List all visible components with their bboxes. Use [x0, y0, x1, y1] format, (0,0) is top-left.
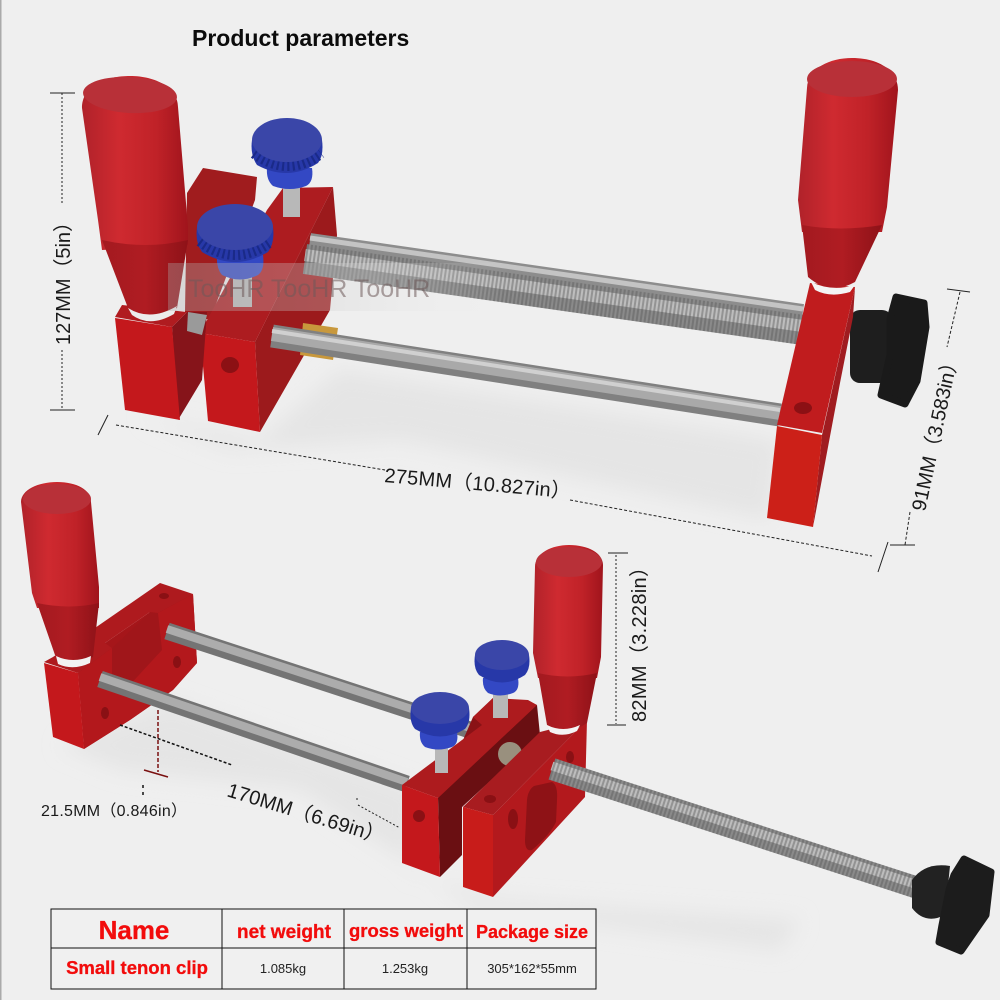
block holes	[101, 593, 181, 719]
upper blue knob	[474, 640, 530, 718]
dimension: 127MM	[50, 93, 75, 410]
table header	[99, 915, 588, 945]
left edge line	[0, 0, 2, 1000]
rear blue knob	[252, 118, 322, 217]
threaded hole	[221, 357, 239, 373]
dimension: 91MM	[890, 289, 970, 545]
front rod	[100, 677, 407, 784]
dimension: 21.5MM: 21.5MM（0.846in）	[41, 802, 187, 820]
title: Product parameters	[192, 25, 409, 51]
right clamp front block	[493, 720, 587, 897]
left block side	[172, 312, 207, 420]
product: bottom clamp	[21, 482, 991, 951]
table row: 1.253kg	[382, 961, 428, 976]
left block top	[44, 583, 193, 673]
right clamp backing	[438, 698, 537, 807]
watermark: TooHR TooHR TooHR	[188, 275, 430, 303]
table header: Name	[99, 915, 169, 945]
right upright top	[777, 283, 855, 433]
smooth upper rod	[310, 238, 803, 311]
right clamp front-left block	[438, 705, 540, 877]
dimension: 170MM: 170MM（6.69in）	[225, 779, 387, 848]
dimension: 91MM: 91MM（3.583in）	[907, 351, 963, 513]
rear part of left block	[185, 168, 257, 320]
rear rod	[167, 629, 473, 731]
left block front	[44, 663, 84, 749]
right upright front	[767, 426, 822, 527]
table row: 1.085kg	[260, 961, 306, 976]
right handle	[533, 545, 603, 735]
rod between blocks	[187, 312, 207, 335]
table header: Package size	[476, 922, 588, 942]
dimension: 275MM: 275MM（10.827in）	[384, 464, 572, 503]
table row	[66, 957, 577, 978]
soft shadows	[140, 370, 780, 520]
watermark	[168, 263, 508, 311]
spring	[498, 742, 522, 766]
spec table	[51, 909, 596, 989]
right upright side	[813, 287, 855, 527]
dimension: 275MM	[98, 415, 888, 572]
threaded rod	[552, 766, 918, 888]
left block backing	[78, 594, 197, 749]
product: top clamp	[82, 58, 926, 527]
table row: 305*162*55mm	[487, 961, 577, 976]
left block side	[78, 594, 197, 749]
inner slot	[112, 612, 162, 690]
dimension: 21.5MM	[41, 710, 232, 820]
table header: net weight	[237, 922, 332, 943]
front blue knob	[197, 204, 273, 307]
middle block top and side	[255, 187, 337, 432]
threaded rod	[305, 255, 803, 330]
left handle	[82, 75, 188, 321]
dimension: 82MM: 82MM（3.228in）	[628, 557, 651, 722]
lower smooth rod	[272, 331, 780, 415]
black knob	[850, 297, 926, 404]
table header: gross weight	[349, 920, 463, 941]
dimension: 82MM	[607, 553, 651, 725]
black knob	[912, 859, 991, 951]
lower blue knob	[410, 692, 470, 773]
holes	[484, 751, 574, 829]
oblong opening	[525, 782, 557, 850]
left block front	[115, 318, 180, 420]
middle block front	[200, 333, 260, 432]
right handle	[798, 58, 898, 295]
left block top	[115, 305, 187, 327]
brass bushing	[300, 323, 338, 360]
soft shadows	[60, 700, 800, 950]
dimension: 127MM: 127MM（5in）	[52, 212, 75, 345]
table row: Small tenon clip	[66, 957, 208, 978]
left handle	[21, 482, 99, 667]
